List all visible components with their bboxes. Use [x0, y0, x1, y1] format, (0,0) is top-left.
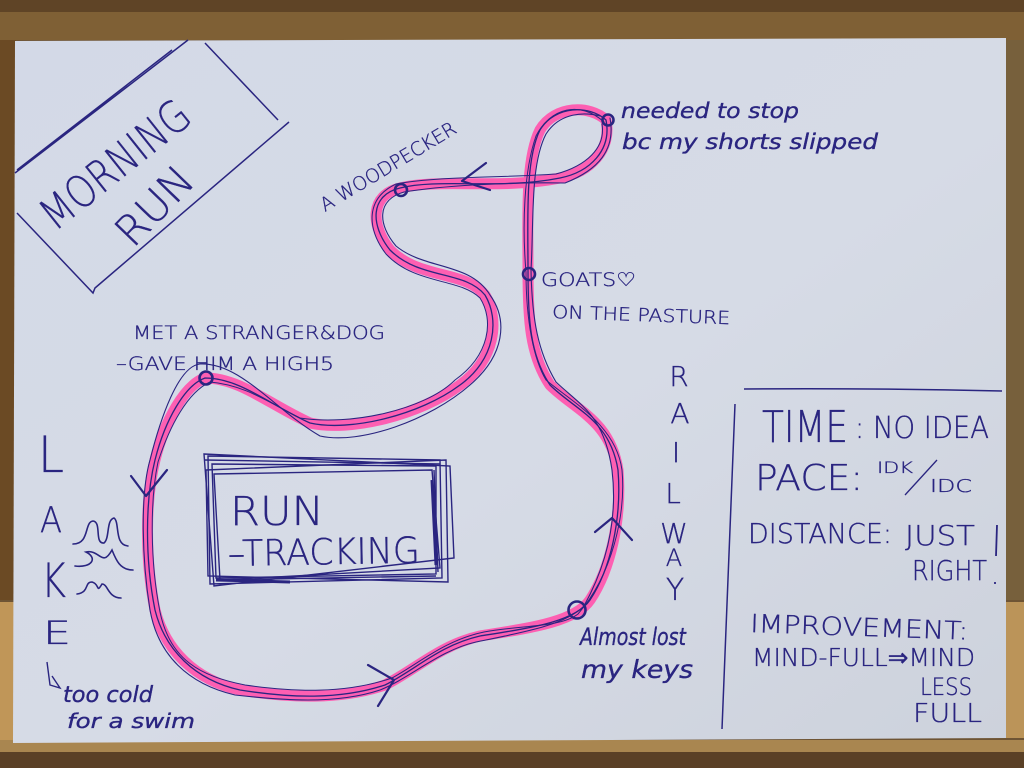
label: lake with waves: A	[40, 500, 62, 541]
label: lake with waves: K	[41, 554, 66, 609]
annotation: lost keys: Almost lost	[578, 623, 687, 651]
stat: distance: DISTANCE:	[748, 517, 892, 550]
annotation: shorts slipped	[621, 99, 879, 154]
label: railway: I	[672, 436, 680, 469]
label: lake with waves	[38, 426, 133, 652]
stat: time: TIME	[762, 402, 848, 453]
annotation: stranger and dog: –GAVE HIM A HIGH5	[116, 353, 334, 375]
annotation: too cold: for a swim	[67, 709, 195, 733]
icon: water waves	[73, 518, 133, 598]
route: ink lines	[143, 109, 623, 700]
direction arrows	[131, 163, 632, 706]
annotation: too cold: too cold	[63, 683, 154, 708]
label: railway: A	[666, 544, 682, 572]
annotation: goats: ON THE PASTURE	[552, 302, 730, 329]
title box: Morning Run	[15, 40, 289, 293]
annotation: lost keys: my keys	[581, 655, 693, 684]
stat: time	[762, 402, 989, 453]
stat: improvement: FULL	[913, 699, 982, 729]
label: railway: Y	[666, 573, 684, 608]
annotation: shorts slipped: needed to stop	[621, 99, 799, 123]
stats panel	[722, 389, 1002, 729]
route: pink highlighter	[148, 110, 619, 696]
stat: pace: IDK	[877, 458, 914, 477]
title box: Morning Run: RUN	[105, 156, 204, 256]
label: railway: L	[665, 477, 681, 510]
central box: run tracking: RUN	[230, 489, 324, 535]
label: lake with waves: E	[43, 614, 71, 652]
annotation: stranger and dog: MET A STRANGER&DOG	[133, 322, 385, 344]
title box: Morning Run: MORNING	[30, 90, 201, 241]
stat: distance: JUST	[905, 519, 975, 552]
central box: run tracking	[204, 454, 454, 586]
annotation: woodpecker: A WOODPECKER	[316, 118, 460, 216]
stat: improvement: IMPROVEMENT:	[750, 609, 969, 646]
stat: improvement	[750, 609, 982, 729]
annotation: stranger and dog	[116, 322, 385, 375]
stat: time: : NO IDEA	[855, 411, 989, 446]
waypoint markers	[200, 114, 614, 618]
stat: improvement: MIND-FULL⇒MIND	[752, 643, 975, 672]
annotation: shorts slipped: bc my shorts slipped	[622, 130, 879, 154]
stat: distance	[748, 517, 997, 587]
stat: pace: PACE:	[755, 458, 863, 499]
route map	[131, 109, 632, 706]
annotation: too cold	[47, 662, 195, 733]
annotation: lost keys	[578, 623, 693, 684]
stat: distance: RIGHT	[912, 554, 987, 587]
label: railway: W	[660, 517, 688, 550]
label: railway: R	[669, 360, 689, 393]
annotation: goats	[541, 269, 730, 329]
label: lake with waves: L	[38, 426, 64, 484]
stat: pace	[755, 458, 972, 499]
stat: improvement: LESS	[920, 673, 972, 701]
central box: run tracking: –TRACKING	[227, 531, 420, 575]
stat: pace: IDC	[930, 476, 972, 497]
annotation: goats: GOATS♡	[541, 269, 636, 291]
label: railway	[660, 360, 690, 608]
label: railway: A	[670, 397, 690, 430]
